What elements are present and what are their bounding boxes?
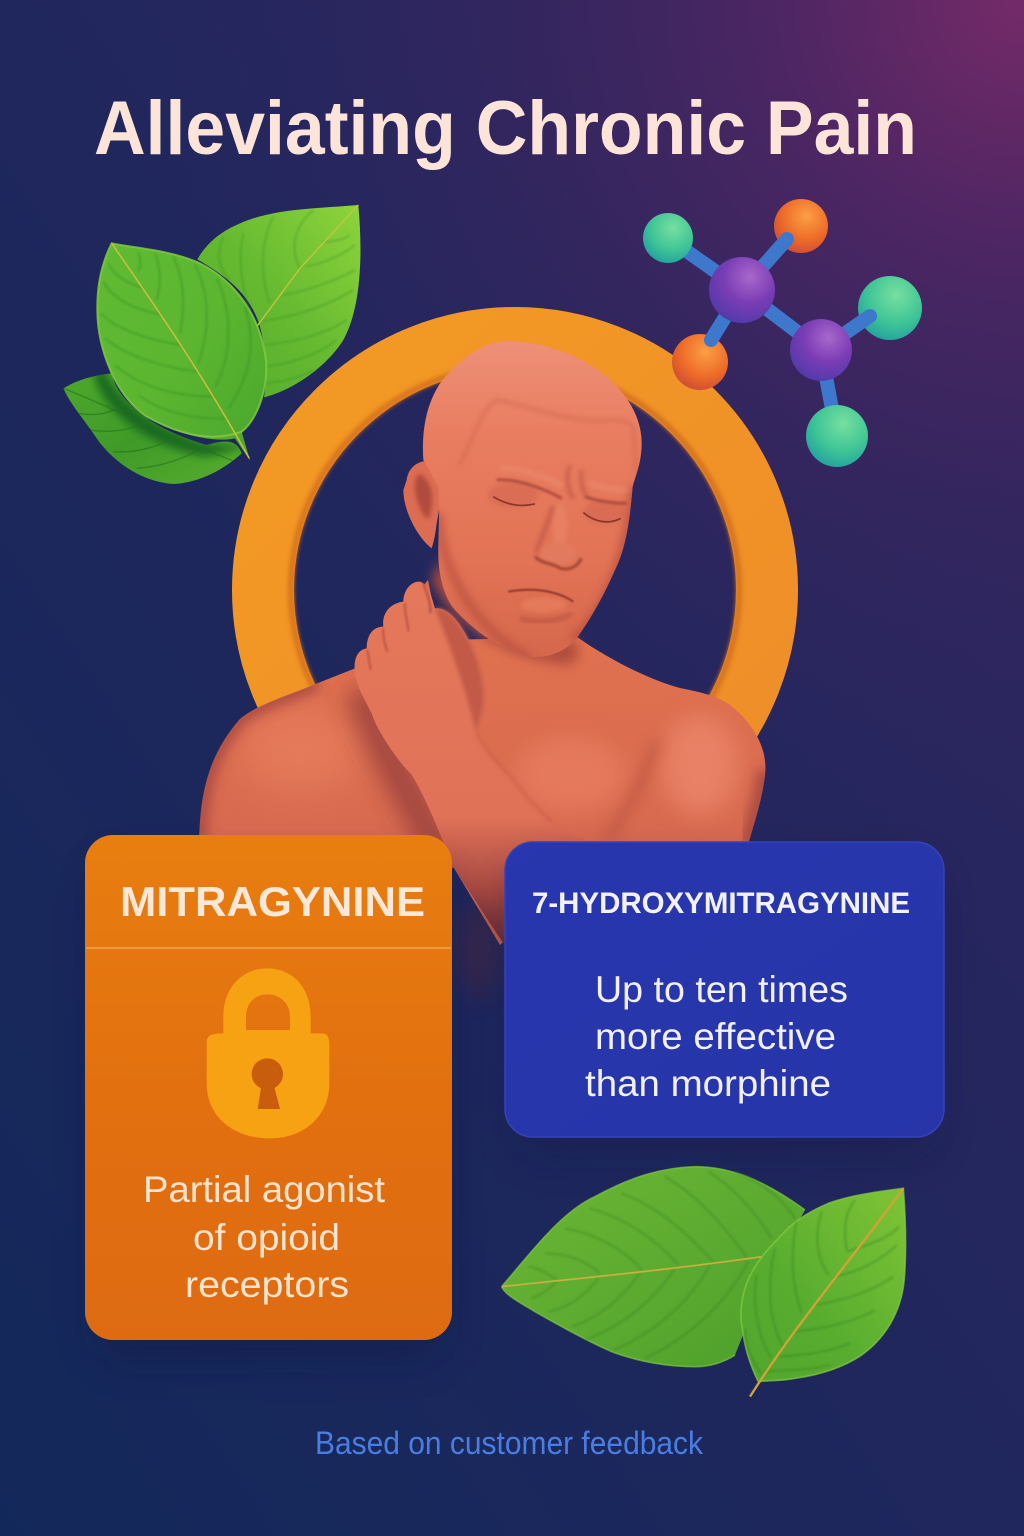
blue card shadow — [515, 865, 935, 1155]
description: more effective — [595, 1016, 836, 1057]
ear — [403, 461, 440, 548]
outer atoms — [643, 199, 922, 467]
face edge shading — [438, 513, 530, 658]
nose — [537, 507, 553, 553]
leaf cluster: top left — [63, 205, 360, 484]
molecule — [643, 199, 922, 467]
description — [585, 969, 848, 1104]
central atoms — [709, 257, 852, 381]
orange halo ring — [263, 338, 767, 842]
orange card shadow — [95, 865, 445, 1360]
finger creases — [367, 603, 408, 670]
furrow — [568, 465, 587, 498]
description: receptors — [185, 1264, 349, 1305]
rear bonds — [668, 238, 837, 436]
mouth — [508, 590, 573, 602]
back leaf upper right — [197, 205, 360, 397]
eye sockets — [490, 484, 537, 506]
torso and shoulders — [199, 580, 766, 945]
divider — [86, 947, 451, 949]
brows — [497, 480, 627, 503]
back leaf lower left — [63, 367, 247, 484]
shadow beneath arm between cards — [452, 904, 504, 996]
human figure in pain — [199, 341, 766, 945]
leaf cluster: bottom right — [502, 1167, 906, 1397]
heading: MITRAGYNINE — [120, 878, 425, 925]
head and face — [423, 341, 642, 658]
footer note: Based on customer feedback — [315, 1425, 704, 1461]
large horizontal leaf — [502, 1167, 805, 1367]
panel: 7-hydroxymitragynine — [505, 842, 944, 1137]
small upright leaf — [741, 1188, 906, 1397]
front bonds — [711, 239, 870, 350]
hand on neck and forearm — [355, 582, 605, 943]
icon: padlock — [207, 968, 329, 1138]
front leaf — [97, 243, 266, 461]
heading: 7-HYDROXYMITRAGYNINE — [532, 887, 910, 920]
description: Up to ten times — [595, 969, 848, 1010]
title: Alleviating Chronic Pain — [94, 86, 917, 171]
hairline ridge — [460, 400, 637, 480]
panel: mitragynine — [85, 835, 452, 1340]
description — [143, 1169, 386, 1305]
closed eyelids — [493, 497, 621, 522]
description: of opioid — [193, 1217, 340, 1258]
description: than morphine — [585, 1063, 831, 1104]
jaw shadow on neck — [432, 560, 578, 665]
description: Partial agonist — [143, 1169, 386, 1210]
